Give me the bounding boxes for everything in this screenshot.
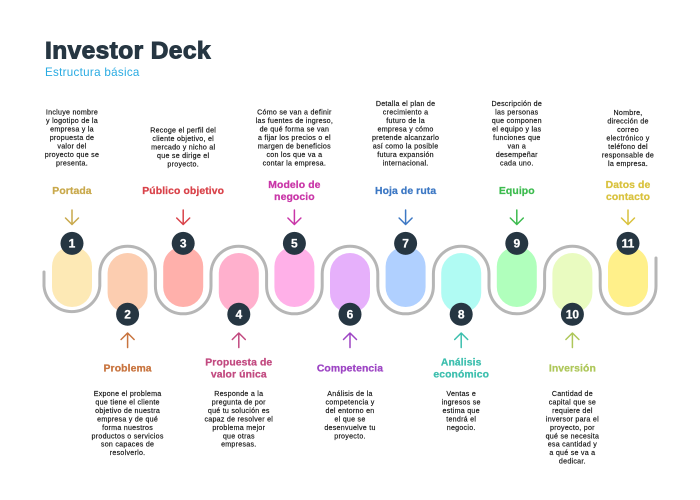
description 11: correo [617, 126, 639, 134]
step 3: Público objetivo [142, 127, 224, 307]
heading 8: económico [433, 370, 489, 380]
description 10: capital que se [549, 398, 596, 406]
heading 8: Análisis [441, 358, 482, 368]
badge 3: 3 [180, 237, 187, 251]
heading 11: Datos de [606, 180, 650, 191]
description 4: pregunta de por [212, 398, 266, 406]
description 5: a fijar los precios o el [258, 134, 331, 142]
description 6: el que se [334, 415, 366, 423]
pill 1 [52, 246, 92, 307]
pill 3 [163, 246, 203, 307]
description 1: propuesta de [50, 134, 94, 142]
description 9: desempeñar [496, 151, 538, 159]
step 8: Análisis económico [433, 253, 489, 432]
badge 8: 8 [458, 308, 465, 322]
description 5: de qué forma se van [260, 126, 329, 134]
description 6: Análisis de la [327, 390, 373, 398]
badge 6: 6 [347, 308, 354, 322]
description 2: objetivo de nuestra [95, 407, 160, 415]
description 1: Incluye nombre [46, 109, 98, 117]
description 2: Expone el problema [94, 390, 161, 398]
arrow 7 [399, 210, 412, 224]
description 4: capaz de resolver el [204, 415, 273, 423]
heading 4: Propuesta de [205, 358, 272, 368]
description 3: mercado y nicho al [151, 144, 215, 152]
badge 8 [450, 303, 473, 326]
arrow 8 [455, 333, 468, 348]
description 7: pretende alcanzarlo [372, 134, 439, 142]
heading 6: Competencia [317, 364, 383, 374]
badge 10 [561, 303, 584, 326]
description 7: internacional. [383, 160, 429, 168]
arrow 2 [121, 333, 134, 348]
description 4: que otras [223, 432, 255, 440]
badge 11: 11 [622, 237, 635, 251]
arrow 10 [566, 333, 579, 348]
badge 2 [116, 303, 139, 326]
description 9: el equipo y las [492, 126, 542, 134]
description 4: problema mejor [212, 424, 266, 432]
step 11: Datos de contacto [602, 109, 654, 307]
description 9: que componen [492, 117, 542, 125]
badge 4: 4 [235, 308, 242, 322]
description 11: teléfono del [608, 143, 648, 151]
description 7: futuro de la [386, 117, 425, 125]
heading 9: Equipo [499, 186, 535, 197]
description 6: del entorno en [326, 407, 374, 415]
description 11: dirección de [607, 118, 649, 126]
badge 3 [172, 232, 195, 255]
description 10: Cantidad de [552, 390, 593, 398]
description 4: qué tu solución es [208, 407, 270, 415]
heading 4: valor única [211, 370, 267, 380]
pill 9 [497, 246, 537, 307]
badge 9 [505, 232, 528, 255]
description 9: cada uno. [500, 160, 534, 168]
step 4: Propuesta de valor única [204, 253, 273, 449]
description 5: con los que va a [266, 151, 322, 159]
description 10: dedicar. [559, 458, 586, 466]
pill 8 [441, 253, 481, 313]
description 8: Ventas e [446, 390, 476, 398]
badge 1: 1 [69, 237, 76, 251]
step 2: Problema [92, 253, 164, 457]
description 5: contar la empresa. [263, 160, 326, 168]
step 9: Equipo [492, 100, 542, 307]
arrow 4 [232, 333, 245, 348]
description 5: las fuentes de ingreso, [256, 117, 333, 125]
description 3: que se dirige el [157, 152, 209, 160]
description 10: a qué se va a [549, 449, 595, 457]
description 2: resolverlo. [110, 449, 145, 457]
step 10: Inversión [546, 253, 599, 466]
step 6: Competencia [317, 253, 383, 440]
heading 7: Hoja de ruta [375, 186, 436, 197]
heading 5: Modelo de [268, 180, 321, 191]
description 2: que tiene el cliente [95, 398, 160, 406]
description 5: margen de beneficios [258, 143, 331, 151]
description 2: son capaces de [101, 441, 154, 449]
description 6: proyecto. [334, 432, 366, 440]
pill 4 [219, 253, 259, 313]
pill 10 [552, 253, 592, 313]
arrow 1 [66, 210, 78, 224]
description 7: empresa y cómo [378, 126, 434, 134]
description 9: las personas [495, 109, 539, 117]
heading 1: Portada [52, 186, 92, 197]
description 11: Nombre, [613, 109, 643, 117]
description 10: proyecto, por [550, 424, 595, 432]
pill 11 [608, 246, 648, 307]
badge 5: 5 [291, 237, 298, 251]
badge 11 [616, 232, 640, 255]
description 3: proyecto. [167, 161, 199, 169]
description 11: responsable de [602, 152, 654, 160]
description 10: esa cantidad y [548, 441, 597, 449]
badge 5 [283, 232, 306, 255]
description 10: requiere del [552, 407, 593, 415]
description 9: funciones que [493, 134, 541, 142]
description 2: productos o servicios [92, 432, 164, 440]
heading 10: Inversión [549, 364, 596, 374]
description 9: van a [507, 143, 526, 151]
description 2: forma nuestros [102, 424, 153, 432]
description 10: qué se necesita [546, 432, 599, 440]
description 11: la empresa. [608, 160, 648, 168]
description 1: empresa y la [50, 126, 94, 134]
description 8: ingresos se [442, 398, 481, 406]
description 9: Descripción de [492, 100, 542, 108]
description 7: Detalla el plan de [376, 100, 435, 108]
heading 5: negocio [274, 192, 315, 203]
description 8: negocio. [447, 424, 476, 432]
arrow 11 [622, 210, 634, 224]
description 8: estima que [443, 407, 480, 415]
timeline: winding path [44, 246, 656, 314]
description 7: así como la posible [373, 143, 438, 151]
badge 4 [227, 303, 250, 326]
description 4: empresas. [221, 441, 257, 449]
badge 2: 2 [124, 308, 131, 322]
description 8: tendrá el [446, 415, 476, 423]
pill 6 [330, 253, 370, 313]
description 6: desenvuelve tu [324, 424, 376, 432]
step 5: Modelo de negocio [256, 109, 333, 307]
description 6: competencia y [325, 398, 375, 406]
arrow 9 [510, 210, 523, 224]
badge 10: 10 [566, 308, 579, 322]
description 1: presenta. [56, 160, 88, 168]
badge 7: 7 [402, 237, 409, 251]
pill 2 [108, 253, 148, 313]
description 1: y logotipo de la [46, 117, 98, 125]
badge 1 [60, 232, 84, 255]
description 10: inversor para el [546, 415, 599, 423]
arrow 3 [177, 210, 190, 224]
description 11: electrónico y [606, 135, 650, 143]
description 1: proyecto que se [45, 151, 99, 159]
arrow 5 [288, 210, 301, 224]
description 4: Responde a la [214, 390, 263, 398]
description 1: valor del [57, 143, 87, 151]
title: Investor Deck [45, 38, 211, 64]
step 7: Hoja de ruta [372, 100, 439, 307]
description 3: Recoge el perfil del [150, 127, 216, 135]
description 5: Cómo se van a definir [257, 109, 332, 117]
description 7: futura expansión [377, 151, 434, 159]
description 7: crecimiento a [383, 109, 428, 117]
badge 7 [394, 232, 417, 255]
badge 6 [338, 303, 362, 326]
heading 2: Problema [104, 364, 152, 374]
heading 3: Público objetivo [142, 186, 224, 197]
heading 11: contacto [606, 192, 650, 203]
subtitle: Estructura básica [45, 66, 140, 79]
arrow 6 [344, 333, 356, 348]
description 2: empresa y de qué [97, 415, 158, 423]
pill 7 [386, 246, 426, 307]
step 1: Portada [45, 109, 99, 307]
description 3: cliente objetivo, el [152, 135, 214, 143]
badge 9: 9 [513, 237, 520, 251]
pill 5 [274, 246, 314, 307]
